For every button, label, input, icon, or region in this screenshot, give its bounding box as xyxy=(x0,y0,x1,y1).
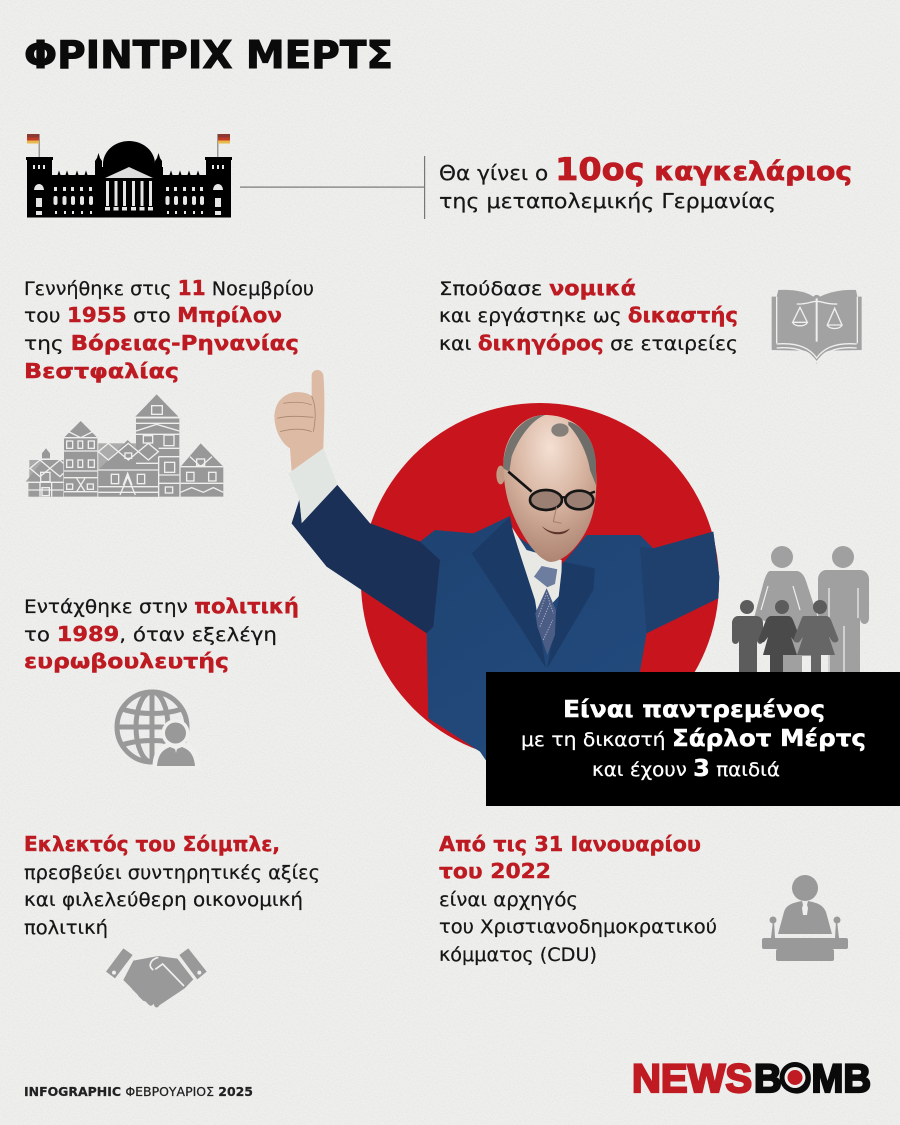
text: birth xyxy=(24,276,314,383)
text: studies: και δικηγόρος σε εταιρείες xyxy=(439,331,738,355)
icon: Reichstag building xyxy=(26,134,232,218)
text: birth: της Βόρειας-Ρηνανίας xyxy=(24,331,299,355)
connector line xyxy=(240,156,425,219)
text: Schäuble: και φιλελεύθερη οικονομική xyxy=(24,889,303,911)
title: ΦΡΙΝΤΡΙΧ ΜΕΡΤΣ xyxy=(24,33,393,77)
icon: globe with person xyxy=(117,692,198,767)
callout: marriage: με τη δικαστή Σάρλοτ Μέρτς xyxy=(521,726,866,752)
text: 10th chancellor xyxy=(439,152,852,213)
text: birth: του 1955 στο Μπρίλον xyxy=(24,303,282,327)
logo: Newsbomb: NEWS xyxy=(632,1057,752,1101)
illustration: red circle xyxy=(361,403,719,761)
icon: family xyxy=(732,546,869,677)
text: birth: Βεστφαλίας xyxy=(24,359,179,383)
text: CDU leader xyxy=(439,832,717,966)
icon: speaker at podium xyxy=(762,875,848,961)
text: studies: και εργάστηκε ως δικαστής xyxy=(439,303,738,327)
text: politics: το 1989 , όταν εξελέγη xyxy=(24,622,277,646)
text: studies xyxy=(439,276,738,355)
text: CDU leader: είναι αρχηγός xyxy=(439,889,578,911)
logo: Newsbomb xyxy=(632,1057,871,1101)
icon: half-timbered houses xyxy=(25,394,223,497)
illustration: Merz portrait xyxy=(274,370,719,760)
icon: law book with scales xyxy=(772,290,862,364)
callout: marriage xyxy=(486,672,900,806)
text: studies: Σπούδασε νομικά xyxy=(439,276,636,300)
text: politics xyxy=(24,594,299,673)
text: Schäuble: πολιτική xyxy=(24,917,108,939)
text: CDU leader: του 2022 xyxy=(439,859,551,883)
text: Schäuble xyxy=(24,832,320,939)
text: CDU leader: Από τις 31 Ιανουαρίου xyxy=(439,832,701,856)
text: birth: Γεννήθηκε στις 11 Νοεμβρίου xyxy=(24,276,314,300)
text: CDU leader: του Χριστιανοδημοκρατικού xyxy=(439,916,717,938)
text: Schäuble: Εκλεκτός του Σόιμπλε, xyxy=(24,832,280,856)
callout: marriage: και έχουν 3 παιδιά xyxy=(592,756,780,782)
text: politics: Εντάχθηκε στην πολιτική xyxy=(24,594,299,618)
icon: handshake xyxy=(106,948,207,1008)
text: politics: ευρωβουλευτής xyxy=(24,649,229,673)
text: CDU leader: κόμματος (CDU) xyxy=(439,944,597,966)
callout: marriage: Είναι παντρεμένος xyxy=(563,697,825,723)
text: Schäuble: πρεσβεύει συντηρητικές αξίες xyxy=(24,862,320,884)
text: 10th chancellor: της μεταπολεμικής Γερμανίας xyxy=(439,189,776,213)
footer label: INFOGRAPHIC ΦΕΒΡΟΥΑΡΙΟΣ 2025 xyxy=(24,1085,253,1099)
logo: Newsbomb: BOMB xyxy=(754,1057,871,1101)
text: 10th chancellor: Θα γίνει ο 10ος καγκελάριος xyxy=(439,152,852,188)
